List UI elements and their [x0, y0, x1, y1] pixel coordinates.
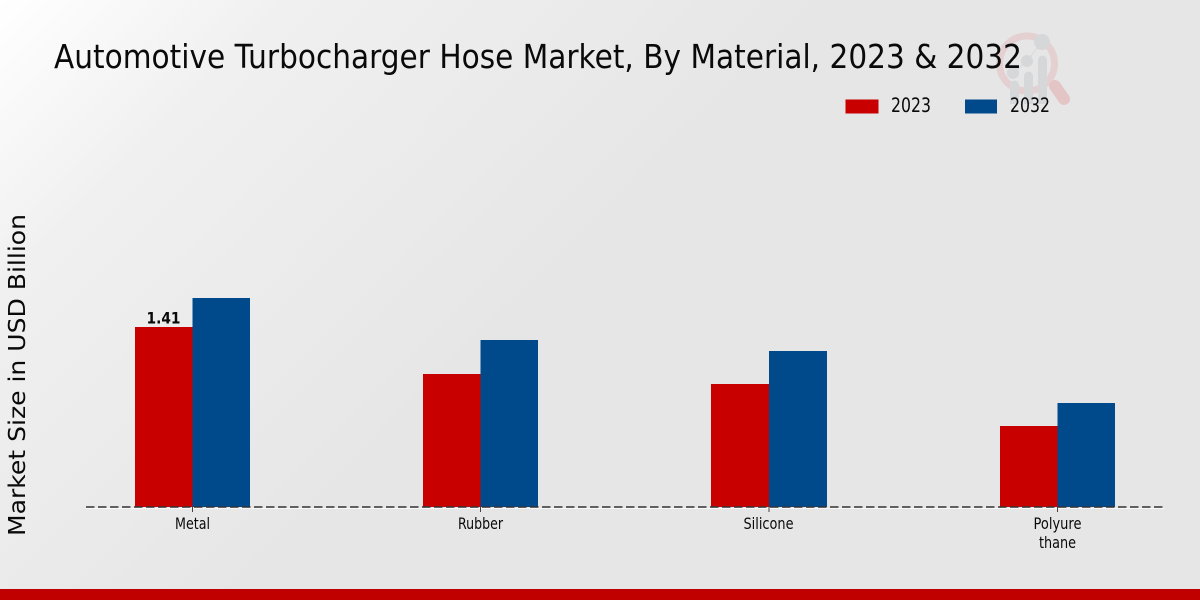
bar chart: [86, 298, 1164, 552]
y-axis title: Market Size in USD Billion: [5, 214, 31, 536]
category label: Polyurethane: Polyure: [1034, 514, 1082, 533]
footer bar: [0, 589, 1200, 600]
icon: watermark logo: [1000, 34, 1064, 104]
legend item: 2023: 2023: [891, 94, 931, 117]
data label: 1.41: 1.41: [146, 308, 180, 328]
x-axis baseline: [86, 507, 1164, 508]
category label: Rubber: Rubber: [458, 514, 503, 533]
bars: Polyurethane: [1000, 403, 1115, 507]
bars: Metal: [135, 298, 250, 507]
category label: Metal: Metal: [175, 514, 210, 533]
category label: Polyurethane: thane: [1039, 533, 1076, 552]
legend: [846, 94, 1050, 117]
category label: Polyurethane: [1034, 514, 1082, 552]
legend item: 2032: [965, 94, 1050, 117]
bars: Silicone: [711, 351, 827, 507]
legend item: 2032: 2032: [1010, 94, 1050, 117]
bars: Rubber: [423, 340, 538, 507]
category label: Silicone: Silicone: [744, 514, 794, 533]
legend item: 2023: [846, 94, 931, 117]
title: Automotive Turbocharger Hose Market, By Material, 2023 & 2032: [54, 37, 1022, 76]
